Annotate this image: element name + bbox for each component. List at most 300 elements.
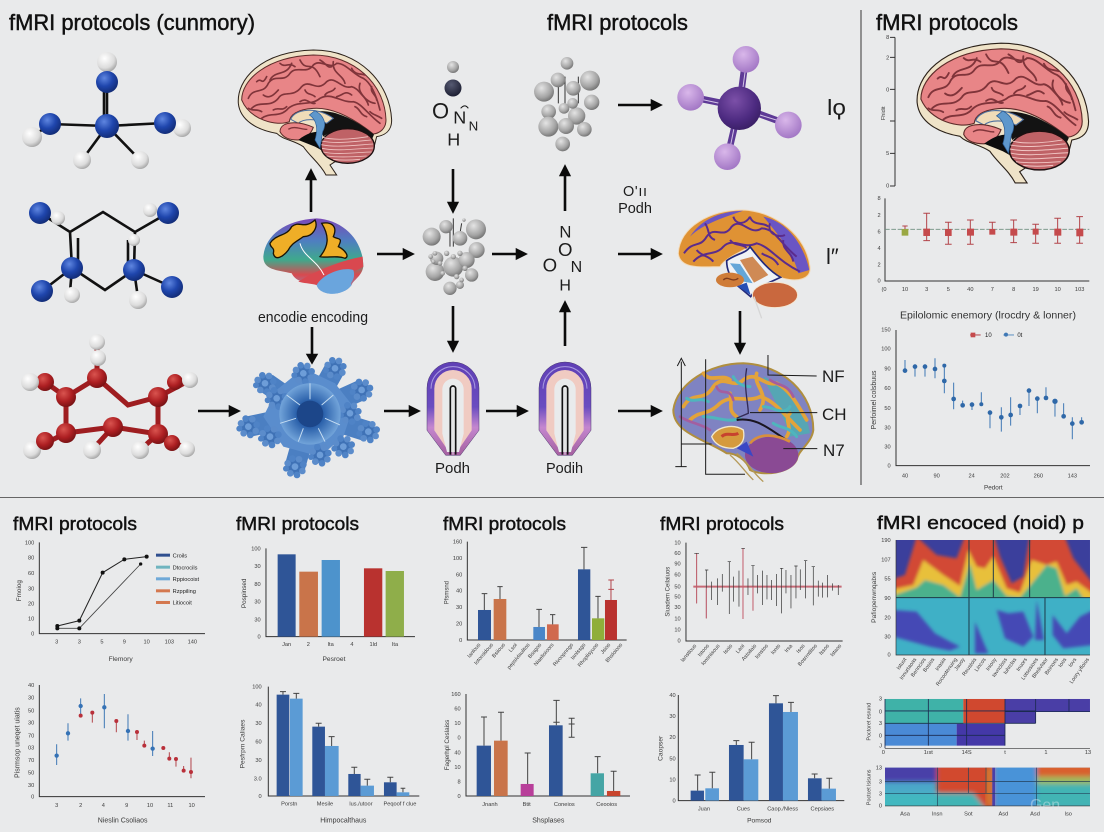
heading: chart three: fMRI protocols [443, 513, 566, 534]
chart: bars with error whiskers: Niaelioioors [533, 642, 556, 668]
chart: block heatmap: 3 [879, 697, 882, 703]
heading: chart two: fMRI protocols [236, 513, 359, 534]
chart: error bar squares: 5 [947, 287, 950, 293]
chart: line chart: 80 [28, 556, 34, 562]
chart: error bar squares: 0 [878, 279, 881, 285]
chart: smooth heatmap: Asa [900, 812, 911, 818]
chart: blue scatter with error bars: 90 [884, 367, 891, 373]
label: chemical N O O N H: N [559, 222, 571, 241]
chart: large heatmap: 190 [881, 538, 891, 544]
label: I'': l″ [826, 244, 839, 269]
chart: smooth heatmap: Asd [998, 812, 1008, 818]
title: centre heading: fMRI protocols [547, 10, 688, 35]
chart: error bar squares: 8 [878, 196, 881, 202]
legend: line chart: Croils [173, 553, 187, 559]
icon: grey sphere cluster [423, 218, 486, 295]
title: right column heading: fMRI protocols [876, 10, 1018, 35]
chart: paired blue bars: lus./utoor [349, 802, 373, 808]
chart: brain axis [881, 35, 895, 190]
chart: line chart: 100 [25, 540, 34, 546]
icon: arch structure one [427, 362, 479, 455]
chart: smooth heatmap: lso [1065, 812, 1072, 818]
chart: error bar squares: 2 [878, 213, 881, 219]
label: Podh: Podh [435, 460, 470, 477]
arrow: encoding to brain [307, 171, 315, 212]
chart: large heatmap: 107 [881, 557, 891, 563]
chart: line chart: 10 [144, 640, 150, 646]
chart: error bar squares: 4 [878, 246, 881, 252]
chart: coloured bars: Ita [392, 642, 399, 648]
chart: coloured bars: 0 [257, 635, 261, 641]
chart: line chart: 20 [28, 601, 34, 607]
chart: blue scatter with error bars: 100 [881, 347, 891, 353]
panel: bottom middle charts [444, 540, 844, 824]
arrow: arch up to N-O [561, 303, 569, 346]
chart: large heatmap: 90 [884, 596, 891, 602]
chart: coloured bars: 80 [254, 582, 261, 588]
chart: error bar strip: 60 [674, 551, 681, 557]
chart: error bar strip: Isois [723, 643, 734, 656]
arrow: to chemical label [449, 169, 457, 211]
chart: large heatmap: Rocootenuing [935, 657, 959, 687]
chart: bars with whiskers lower: Ceooios [596, 802, 617, 808]
chart: line chart: 10 [28, 616, 34, 622]
chart: scatter: 30 [28, 783, 34, 789]
chart: grouped bars lower: 10 [669, 778, 676, 784]
chart: large heatmap: 0 [888, 653, 891, 659]
title: main heading: fMRI protocols (cunmory) [9, 10, 255, 35]
chart: bars with error whiskers: Rivoopnngs [552, 642, 575, 668]
chart: bars with whiskers lower: Fagerhpl Ceslaiss [444, 720, 451, 770]
chart: large heatmap: Loory yfloios [1069, 657, 1091, 685]
watermark: Gen [1030, 797, 1060, 814]
arrow: cluster to arch [449, 306, 457, 350]
chart: paired blue bars: 100 [252, 685, 262, 691]
label: chemical N O O N H: O [543, 254, 557, 275]
label: Iq: lϙ [827, 95, 846, 120]
chart: brain axis: 0 [886, 87, 889, 93]
chart: blue scatter with error bars [871, 328, 1090, 491]
chart: block heatmap: 0 [879, 733, 882, 739]
label: CH: CH [822, 405, 847, 424]
molecule: blue top [22, 52, 191, 169]
chart: smooth heatmap: Poctcet lsisuns [867, 769, 873, 805]
chart: bars with error whiskers: Bsagos [527, 642, 543, 660]
chart: bars with error whiskers: 20 [456, 622, 462, 628]
chart: error bar strip: lssos [818, 643, 831, 657]
chart: scatter: 11 [167, 803, 173, 809]
chart: large heatmap: Iovs [1068, 657, 1078, 668]
chart: bars with whiskers lower: 40 [454, 750, 461, 756]
chart: line chart: 3 [78, 640, 81, 646]
heading: chart one: fMRI protocols [13, 513, 137, 534]
chart: line chart [16, 540, 205, 663]
chart: grouped bars lower: 20 [669, 735, 676, 741]
chart: large heatmap: 30 [884, 634, 891, 640]
arrow: protein to arch [384, 407, 418, 415]
label: N7: N7 [823, 441, 845, 460]
chart: error bar strip: 10 [674, 627, 681, 633]
chart: large heatmap: Istuot [896, 657, 909, 671]
chart: scatter: 50 [28, 708, 34, 714]
chart: paired blue bars: 30 [255, 721, 262, 727]
chart: block heatmap: 3 [879, 721, 882, 727]
chart: grouped bars lower: 0 [672, 799, 676, 805]
chart: scatter: 10 [188, 803, 195, 809]
chart: paired blue bars: Porstn [281, 802, 297, 808]
chart: large heatmap: Bhelivlaor [1031, 657, 1050, 680]
chart: blue scatter with error bars: 0 [888, 463, 891, 469]
chart: error bar squares: 2 [878, 263, 881, 269]
label: NF: NF [822, 367, 845, 386]
chart: block heatmap [867, 697, 1091, 756]
chart: block heatmap: t [1004, 750, 1006, 756]
chart: large heatmap: Iavncloss [991, 657, 1009, 679]
chart: smooth heatmap: 3 [879, 779, 882, 785]
label: chemical ON N H: N [469, 119, 478, 134]
chart: bars with whiskers lower: 8 [458, 779, 461, 785]
icon: brain anatomy [238, 50, 392, 175]
chart: large heatmap [871, 533, 1097, 687]
chart: coloured bars: 4 [350, 642, 354, 648]
chart: bars with error whiskers: lotoroidous [474, 642, 495, 666]
chart: paired blue bars: 30 [255, 758, 262, 764]
legend: line chart: Dtocrocils [173, 565, 198, 571]
legend [970, 333, 1023, 339]
chart: error bar strip: 50 [674, 594, 681, 600]
chart: error bar strip: lonsniaous [701, 643, 722, 667]
chart: line chart: Fmoiog [16, 580, 23, 601]
chart: large heatmap: Inuors [1016, 657, 1029, 673]
chart: scatter: 2 [79, 803, 82, 809]
icon: grey sphere cluster top [534, 57, 600, 151]
chart: coloured bars: 30 [254, 564, 261, 570]
chart: error bar squares: 7 [991, 287, 994, 293]
chart: blue scatter with error bars: 60 [884, 386, 891, 392]
chart: coloured bars: Pesroet [322, 656, 346, 663]
chart: error bar strip: 10 [674, 540, 681, 546]
chart: paired blue bars: Mesile [317, 802, 333, 808]
arrow: orange brain to MRI [736, 311, 744, 352]
chart: error bar strip: 30 [674, 605, 681, 611]
chart: bars with error whiskers: Rhoplisyuos [577, 642, 600, 669]
chart: bars with error whiskers [444, 540, 627, 671]
chart: error bar squares: 10 [902, 287, 908, 293]
chart: scatter: 30 [28, 696, 34, 702]
chart: coloured bars: Pospinsed [241, 578, 248, 608]
chart: blue scatter with error bars: 40 [902, 473, 908, 479]
chart: paired blue bars: Pesfrpm Caliaes [239, 719, 246, 768]
chart: bars with whiskers lower: Btit [523, 802, 531, 808]
chart: bars with whiskers lower: 0 [458, 794, 461, 800]
chart: scatter: 50 [28, 771, 34, 777]
arrow: encoding to protein [308, 327, 316, 362]
chart: brain axis: 5 [886, 151, 889, 157]
chart: coloured bars: 1ld [370, 642, 377, 648]
chart: bars with whiskers lower: Jnanh [482, 802, 498, 808]
chart: bars with error whiskers: Bhsloioos [605, 642, 624, 664]
label: O'u Podh [618, 184, 652, 217]
chart: error bar strip: lstaos [830, 643, 843, 658]
icon: purple molecule [677, 46, 802, 170]
chart: error bar squares: 8 [1012, 287, 1015, 293]
chart: large heatmap: Benncios [910, 657, 928, 678]
chart: error bar squares: 10 [1054, 287, 1061, 293]
chart: smooth heatmap: lnsn [932, 812, 943, 818]
heading: chart five: fMRI encoced (noid) p [877, 512, 1084, 533]
chart: block heatmap: 0 [879, 709, 882, 715]
chart: bars with whiskers lower: 60 [454, 706, 461, 712]
label: O'u Podh: O'ıı [623, 184, 647, 200]
chart: grouped bars lower: Pomsod [747, 817, 772, 824]
chart: bars with error whiskers: 30 [456, 605, 462, 611]
chart: bars with error whiskers: Ianlous [467, 642, 482, 659]
arrow: left molecule to protein [198, 407, 238, 415]
chart: error bar strip: Siuadem Ceilaiuos [665, 567, 671, 617]
chart: coloured bars: 30 [254, 600, 261, 606]
chart: coloured bars: 100 [251, 546, 261, 552]
chart: error bar strip: 50 [674, 584, 681, 590]
chart: line chart: 30 [28, 586, 34, 592]
chart: large heatmap: Iuhrclas [1003, 657, 1018, 676]
arrow: N-O up to cluster [561, 167, 569, 211]
icon: annotated MRI brain [673, 355, 817, 482]
chart: error bar strip: Irsa [784, 643, 794, 654]
legend: 0t [1017, 333, 1023, 339]
arrow: cluster to purple molecule [618, 101, 660, 109]
label: chemical N O O N H [543, 222, 582, 295]
chart: blue scatter with error bars: 30 [884, 445, 891, 451]
chart: scatter: 40 [28, 683, 34, 689]
chart: line chart: 5 [100, 640, 104, 646]
chart: brain axis: 2 [886, 55, 889, 61]
chart: error bar squares: 40 [967, 287, 973, 293]
chart: error bar strip [665, 540, 843, 668]
chart: coloured bars: 30 [254, 617, 261, 623]
chart: brain axis: 8 [886, 35, 889, 41]
chart: coloured bars: Jan [282, 642, 291, 648]
chart: bars with whiskers lower: Coneios [554, 802, 575, 808]
label: chemical N O O N H: O [558, 239, 573, 260]
chart: scatter: 03 [28, 746, 34, 752]
chart: blue scatter with error bars: Perfoimel colsbuus [871, 370, 878, 429]
chart: error bar squares: (0 [881, 287, 887, 293]
chart: brain axis: 0 [886, 184, 889, 190]
chart: large heatmap: Inasia [935, 657, 948, 672]
chart: bars with whiskers lower [444, 692, 630, 824]
label: chemical ON N H: O [432, 99, 449, 124]
chart: blue scatter with error bars: 24 [969, 473, 975, 479]
chart: bars with whiskers lower: 10 [454, 765, 461, 771]
chart: blue scatter with error bars: 90 [934, 473, 940, 479]
chart: error bar strip: Isos [796, 643, 807, 655]
chart: block heatmap: J [879, 743, 882, 749]
chart: scatter: Pisrmsop uneqet uiatis [14, 707, 21, 778]
chart: scatter: 9 [125, 803, 128, 809]
label: encoding: encodie encoding [258, 310, 368, 326]
chart: line chart: 60 [28, 571, 34, 577]
panel: heatmaps [867, 533, 1097, 818]
chart: error bar strip: 10 [674, 616, 681, 622]
label: chemical ON N H: N [453, 107, 466, 127]
chart: bars with error whiskers: 160 [453, 540, 462, 546]
chart: scatter [14, 683, 205, 825]
icon: arch structure two [539, 362, 591, 455]
chart: blue scatter with error bars: Pedort [984, 484, 1003, 491]
chart: large heatmap: 55 [884, 577, 891, 583]
chart: paired blue bars: 40 [255, 703, 262, 709]
chart: error bar strip: lanstlous [680, 643, 698, 663]
panel: centre flow diagram [198, 46, 847, 482]
chart: grouped bars lower: 40 [669, 693, 676, 699]
label: chemical ON N H: H [447, 129, 460, 149]
chart: blue scatter with error bars: 202 [1000, 473, 1010, 479]
chart: block heatmap: 14S [962, 750, 972, 756]
chart: smooth heatmap: Sot [964, 812, 973, 818]
chart: scatter: 4 [102, 803, 105, 809]
chart: bars with error whiskers: 100 [453, 556, 462, 562]
icon: brain in right column [917, 43, 1089, 183]
chart: paired blue bars: Peqoof f clue [383, 802, 416, 808]
chart: grouped bars lower: Caopser [657, 735, 664, 761]
chart: bars with error whiskers: Bsiious [491, 642, 507, 659]
chart: large heatmap: Reustois [961, 657, 978, 677]
chart: error bar strip: 90 [674, 562, 681, 568]
chart: error bar squares: 19 [1033, 287, 1039, 293]
chart: bars with error whiskers: Jsios [600, 642, 612, 656]
arrow: arch to MRI brain [618, 407, 660, 415]
chart: block heatmap: Poctoret esrund [867, 703, 873, 740]
chart: blue scatter with error bars: 143 [1068, 473, 1077, 479]
chart: error bar squares: 103 [1075, 287, 1084, 293]
chart: blue scatter with error bars: 30 [884, 425, 891, 431]
chart: paired blue bars: 0 [258, 794, 262, 800]
chart: paired blue bars: 60 [255, 740, 262, 746]
chart: bars with error whiskers: pepsivlaulitos [506, 642, 532, 671]
chart: bars with whiskers lower: 0 [458, 735, 461, 741]
chart: scatter: 3 [55, 803, 58, 809]
chart: grouped bars lower: 30 [669, 714, 676, 720]
label: chemical ON N H [432, 99, 478, 149]
icon: blue protein cluster [236, 357, 380, 478]
chart: scatter: 0 [31, 795, 34, 801]
chart: smooth heatmap: Asd [1030, 812, 1040, 818]
chart: bars with error whiskers: Lsoi [508, 642, 519, 654]
chart: grouped bars lower: Cues [737, 806, 750, 812]
chart: scatter: 70 [28, 758, 34, 764]
chart: line chart: 9 [123, 640, 126, 646]
chart: block heatmap: 13 [1085, 750, 1091, 756]
chart: grouped bars lower [657, 693, 844, 824]
label: Podih: Podih [546, 461, 583, 477]
legend: line chart: Litiocoit [173, 601, 192, 607]
chart: smooth heatmap [867, 763, 1093, 818]
label: chemical N O O N H: N [571, 259, 582, 276]
chart: bars with whiskers lower: 160 [451, 692, 461, 698]
chart: brain axis: Fhidit [881, 106, 887, 120]
chart: error bar strip: 60 [674, 573, 681, 579]
chart: bars with whiskers lower: 10 [454, 721, 461, 727]
chart: block heatmap: 0 [882, 750, 885, 756]
arrow: encoding to cluster [377, 250, 412, 258]
chart: large heatmap: Pafiopenwnqabıs [871, 571, 878, 623]
icon: orange brain [678, 210, 810, 318]
chart: large heatmap: Beinoes [1044, 657, 1060, 676]
chart: block heatmap: 1ıst [924, 750, 933, 756]
chart: blue scatter with error bars: 50 [884, 406, 891, 412]
chart: bars with error whiskers: 40 [456, 589, 462, 595]
chart: large heatmap: Innurtaoas [899, 657, 918, 681]
chart: scatter: 30 [28, 721, 34, 727]
chart: blue scatter with error bars: 260 [1034, 473, 1043, 479]
chart: coloured bars [241, 546, 415, 663]
chart: large heatmap: Ioos [1058, 657, 1068, 669]
chart: line chart: 3 [55, 640, 58, 646]
chart: bars with error whiskers: 60 [456, 572, 462, 578]
chart: grouped bars lower: Caop./Nless [767, 806, 798, 812]
chart: scatter: 70 [28, 733, 34, 739]
arrow: cluster to N-O label [492, 250, 525, 258]
icon: dark atoms [444, 61, 462, 96]
legend: line chart: Rppiocoist [173, 577, 199, 583]
chart: large heatmap: Jauoy [954, 657, 967, 672]
chart: scatter: Nieslin Csoliaos [98, 818, 148, 825]
chart: line chart: 140 [188, 640, 197, 646]
label: chart caption: Epilolomic enemory (lrocdry & lonner) [900, 310, 1076, 321]
chart: error bar squares: 3 [925, 287, 928, 293]
chart: block heatmap: 1 [1044, 750, 1048, 756]
chart: grouped bars lower: 50 [669, 756, 676, 762]
chart: line chart: Flemory [109, 656, 133, 663]
legend: line chart: Rzppiling [173, 589, 196, 595]
chart: blue scatter with error bars: 150 [881, 328, 891, 334]
arrow: N-O to orange brain [618, 250, 660, 258]
chart: scatter: 10 [147, 803, 153, 809]
chart: large heatmap: 20 [884, 615, 891, 621]
chart: bars with error whiskers: Ianlssgs [570, 642, 587, 661]
chart: grouped bars lower: Juan [698, 806, 710, 812]
heading: chart four: fMRI protocols [660, 513, 784, 534]
icon: colour-mapped brain [263, 218, 363, 294]
chart: grouped bars lower: Cepsiaes [810, 806, 834, 812]
molecule: red ring [21, 334, 198, 459]
chart: line chart: 0 [31, 632, 34, 638]
chart: error bar squares [878, 196, 1089, 293]
chart: smooth heatmap: 0 [879, 804, 882, 810]
legend: 10 [985, 333, 992, 339]
panel: right column charts [871, 35, 1090, 491]
chart: bars with whiskers lower: Shsplases [532, 817, 565, 824]
chart: large heatmap: Iniooy [985, 657, 998, 672]
chart: coloured bars: Ita [327, 642, 335, 648]
chart: large heatmap: Lotsosioes [1020, 657, 1040, 681]
chart: line chart: 103 [165, 640, 174, 646]
chart: error bar strip: lonts [770, 643, 782, 656]
legend: line chart [156, 553, 199, 607]
chart: large heatmap: Lincos [974, 657, 988, 673]
chart: error bar squares: 6 [878, 229, 881, 235]
chart: large heatmap: Bosios [922, 657, 936, 674]
chart: error bar strip: Astoilais [741, 643, 758, 662]
chart: error bar strip: lonstos [754, 643, 770, 660]
chart: error bar strip: 0 [677, 639, 681, 645]
chart: bars with error whiskers: Pfsmsnd [444, 581, 450, 604]
label: O'u Podh: Podh [618, 201, 652, 217]
chart: coloured bars: 2 [307, 642, 310, 648]
chart: smooth heatmap: 3 [879, 791, 882, 797]
arrow: arch to arch [486, 407, 526, 415]
molecule: blue hexagon [29, 202, 183, 309]
